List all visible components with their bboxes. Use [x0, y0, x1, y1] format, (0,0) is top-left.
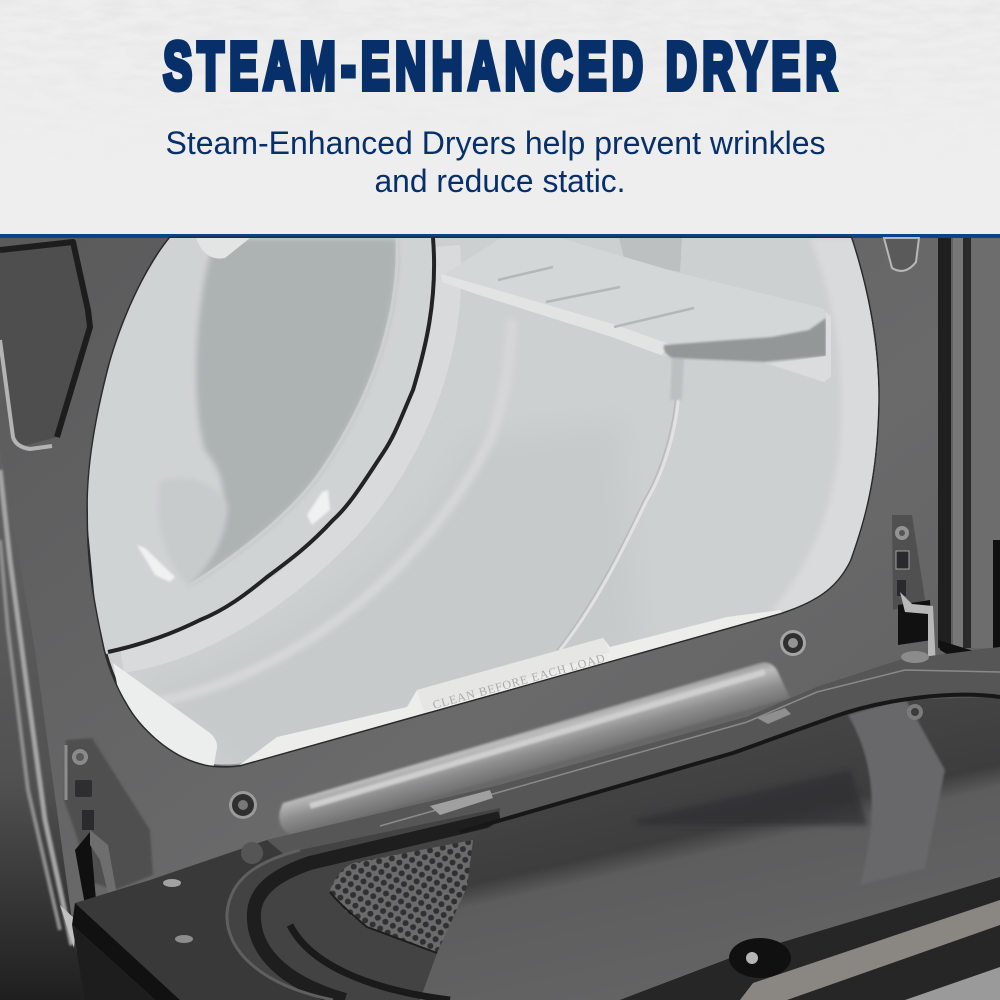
- door screw in glass: [907, 704, 923, 720]
- ridge highlight: [310, 672, 765, 806]
- door glass: [420, 697, 1000, 1000]
- open door: [72, 647, 1000, 1000]
- left cabinet edge: [0, 450, 90, 1000]
- drum sweep: [162, 402, 502, 704]
- lint filter label: CLEAN BEFORE EACH LOAD: [431, 651, 607, 712]
- header panel: [162, 39, 840, 92]
- lower seal: [290, 925, 450, 1000]
- door lower trim dark: [620, 877, 1000, 1000]
- glass dark reflection: [634, 770, 868, 825]
- blue divider: [0, 234, 1000, 238]
- panel ridge: [279, 662, 790, 836]
- door screw lower: [175, 935, 193, 943]
- area beneath door edge: [72, 925, 155, 1000]
- door seal line: [460, 695, 1000, 832]
- left hinge: [64, 738, 153, 910]
- subtitle: and reduce static.: [374, 163, 626, 199]
- subtitle: [166, 125, 826, 199]
- inner door seal: [330, 892, 437, 953]
- ring shadow band: [187, 238, 397, 587]
- ring: [122, 246, 448, 660]
- mesh vent: [330, 840, 473, 953]
- lint filter: [233, 610, 790, 775]
- lower left white ledge: [113, 663, 217, 770]
- drum baffle back: [619, 238, 682, 272]
- screw right: [780, 630, 806, 656]
- door carbon surface: [227, 808, 500, 1000]
- top drum lump: [196, 238, 250, 259]
- black door seal: [108, 238, 434, 652]
- glass right reflection: [848, 698, 945, 885]
- drum opening rim: [88, 238, 878, 766]
- subtitle: Steam-Enhanced Dryers help prevent wrinkles: [166, 125, 826, 161]
- door gasket: [254, 818, 500, 1000]
- lower drum floor: [206, 654, 632, 766]
- title: STEAM-ENHANCED DRYER: [163, 28, 837, 103]
- door reflection dot: [241, 842, 263, 864]
- right cabinet edge: [938, 238, 1000, 650]
- outer drum wall: [430, 238, 878, 712]
- screw left: [229, 791, 257, 819]
- door lower screw: [729, 938, 791, 978]
- door lower corner: [905, 967, 1000, 1000]
- rear wall dark centre: [187, 238, 397, 587]
- dryer front panel: [0, 238, 1000, 1000]
- door screw left: [163, 879, 181, 887]
- right embossed notch: [884, 238, 919, 271]
- door clip: [757, 708, 791, 724]
- door lower trim: [740, 900, 1000, 1000]
- drum baffle: [440, 238, 831, 382]
- rear wall light: [60, 238, 434, 655]
- left embossed recess: [0, 242, 90, 449]
- drum seam: [557, 358, 684, 650]
- door left edge: [72, 903, 180, 1000]
- right hinge: [892, 515, 977, 668]
- door screw top: [901, 651, 929, 663]
- door top band: [267, 647, 1000, 868]
- drum interior: [60, 238, 900, 780]
- dryer photo illustration: [0, 238, 1000, 1000]
- rear wall highlight: [196, 491, 229, 576]
- door clip left: [430, 790, 493, 815]
- glints: [137, 490, 330, 582]
- front rim band: [776, 238, 878, 614]
- door gasket outer: [227, 850, 333, 1000]
